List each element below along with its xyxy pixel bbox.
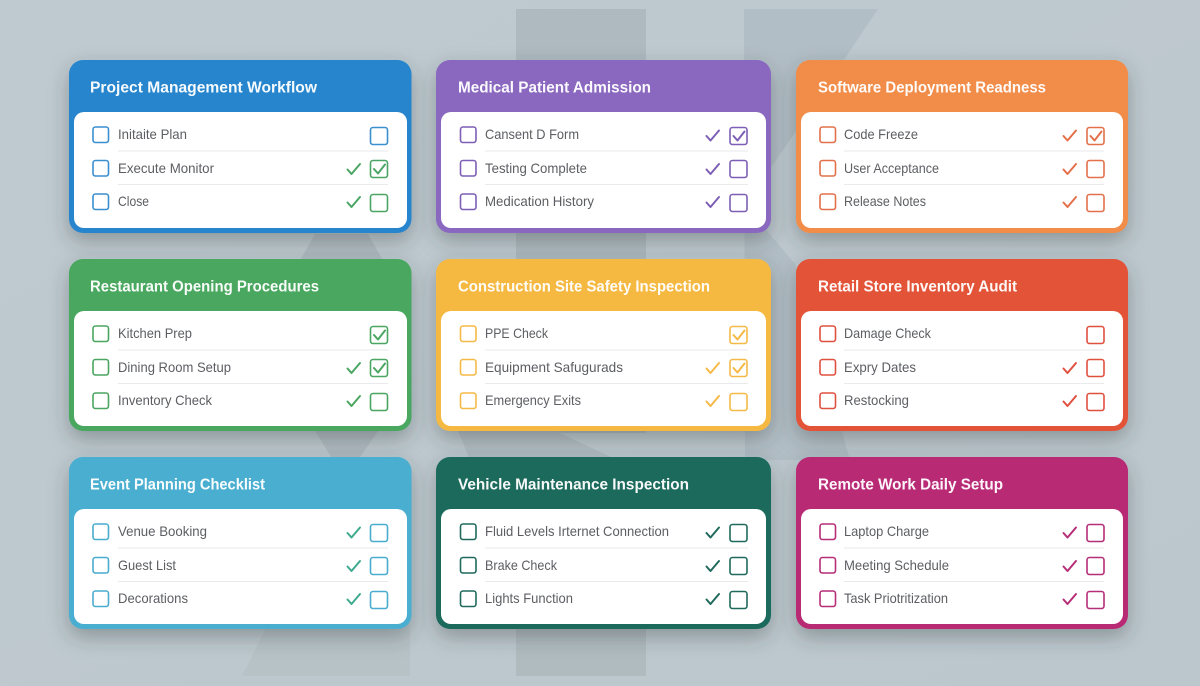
panel [74,311,407,426]
row: Fluid Levels Irternet Connection: Fluid Levels Irternet Connection [485,523,669,539]
card: Medical Patient Admission [436,60,771,233]
row: Initaite Plan: Initaite Plan [118,126,187,142]
row: Close: Close [118,193,149,209]
row: Execute Monitor [93,160,388,178]
row: Execute Monitor: Execute Monitor [118,160,214,176]
card: Project Management Workflow [69,60,412,233]
row: Testing Complete: Testing Complete [485,160,587,176]
row: Close [93,193,388,212]
title: Retail Store Inventory Audit [818,278,1018,296]
panel [441,311,766,426]
card body [436,259,771,431]
row: Restocking [820,392,1104,410]
row: User Acceptance [820,160,1104,178]
panel [74,112,407,228]
background watermark shapes [242,9,878,676]
row: Guest List [93,557,388,574]
row: Lights Function: Lights Function [485,590,573,606]
row: Laptop Charge [820,523,1104,542]
title: Software Deployment Readness [818,80,1046,96]
card: Construction Site Safety Inspection [436,259,771,431]
row: Code Freeze [820,126,1104,144]
row: Code Freeze: Code Freeze [844,126,918,142]
row: Kitchen Prep: Kitchen Prep [118,325,192,341]
row: Venue Booking [93,523,388,542]
row: Cansent D Form [460,126,747,144]
row: Medication History: Medication History [485,193,594,209]
card: Software Deployment Readness [796,60,1128,233]
row: Guest List: Guest List [118,557,176,573]
row: Restocking: Restocking [844,392,909,408]
panel [801,311,1123,426]
panel [74,509,407,624]
row: Expry Dates: Expry Dates [844,359,916,375]
row: Laptop Charge: Laptop Charge [844,523,929,539]
row: Release Notes [820,193,1104,212]
row: Equipment Safugurads [460,359,747,376]
title: Construction Site Safety Inspection [458,278,710,296]
title: Event Planning Checklist [90,476,266,494]
row: Inventory Check [93,392,388,410]
card body [436,60,771,233]
row: Damage Check [820,325,1104,344]
card: Remote Work Daily Setup [796,457,1128,629]
row: Brake Check [460,557,747,574]
row: Testing Complete [460,160,747,178]
row: Meeting Schedule: Meeting Schedule [844,557,949,573]
row: Lights Function [460,590,747,608]
row: Decorations [93,590,388,608]
card body [69,457,412,629]
panel [441,509,766,624]
title: Project Management Workflow [90,80,318,96]
row: Kitchen Prep [93,325,388,344]
row: Task Priotritization [820,590,1104,608]
card body [796,259,1128,431]
row: Emergency Exits: Emergency Exits [485,392,581,408]
row: PPE Check [460,325,747,344]
row: Expry Dates [820,359,1104,376]
title: Remote Work Daily Setup [818,476,1003,494]
card: Vehicle Maintenance Inspection [436,457,771,629]
card body [436,457,771,629]
row: Damage Check: Damage Check [844,325,932,341]
row: Dining Room Setup: Dining Room Setup [118,359,231,375]
row: Initaite Plan [93,126,388,144]
row: Medication History [460,193,747,212]
panel [441,112,766,228]
row: Equipment Safugurads: Equipment Safugurads [485,359,623,375]
card body [796,60,1128,233]
row: Task Priotritization: Task Priotritization [844,590,948,606]
row: Dining Room Setup [93,359,388,376]
card: Retail Store Inventory Audit [796,259,1128,431]
card body [69,60,412,233]
row: Inventory Check: Inventory Check [118,392,213,408]
card: Restaurant Opening Procedures [69,259,412,431]
card body [796,457,1128,629]
row: PPE Check: PPE Check [485,325,549,341]
row: Fluid Levels Irternet Connection [460,523,747,542]
row: Release Notes: Release Notes [844,193,926,209]
panel [801,509,1123,624]
row: Venue Booking: Venue Booking [118,523,207,539]
row: Emergency Exits [460,392,747,410]
card body [69,259,412,431]
card: Event Planning Checklist [69,457,412,629]
title: Restaurant Opening Procedures [90,278,319,296]
row: Cansent D Form: Cansent D Form [485,126,579,142]
row: User Acceptance: User Acceptance [844,160,939,176]
title: Vehicle Maintenance Inspection [458,476,689,494]
row: Brake Check: Brake Check [485,557,558,573]
row: Decorations: Decorations [118,590,188,606]
title: Medical Patient Admission [458,80,651,96]
panel [801,112,1123,228]
row: Meeting Schedule [820,557,1104,574]
